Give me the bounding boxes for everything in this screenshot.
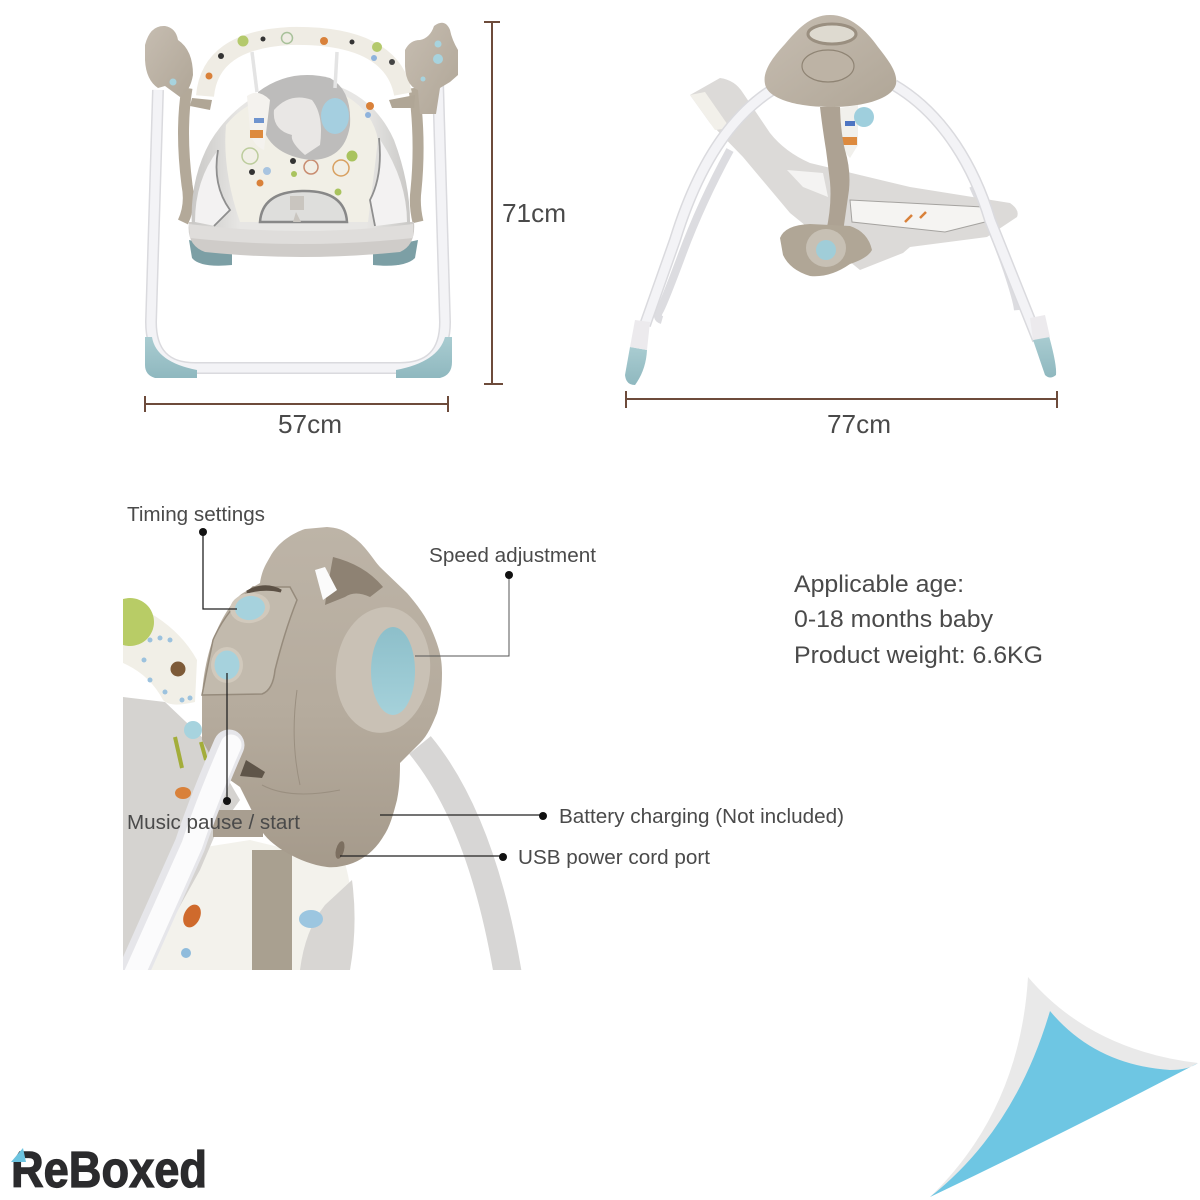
front view: left stitching: [214, 150, 230, 226]
front view: right teal corner: [373, 240, 418, 266]
callout: battery charging: Battery charging (Not included): [559, 805, 844, 828]
close-up: white front tube: [132, 745, 229, 975]
corner curl: blue triangle: [930, 1011, 1198, 1197]
front view: neck pillow: [258, 75, 350, 160]
front view: hanging strings: [252, 52, 337, 92]
front view: arch ends: [190, 95, 415, 110]
side view: white panel front: [850, 200, 987, 232]
close-up: button panel: [202, 587, 297, 695]
side view: hub button: [816, 240, 836, 260]
front view: right side pad: [370, 138, 407, 226]
side view: front right leg highlight: [894, 85, 1038, 340]
close-up: top slot: [247, 587, 281, 592]
close-up: arch brown dot: [170, 662, 186, 676]
dimension label 57cm: 57cm: [278, 409, 342, 439]
callout: timing settings: [127, 503, 265, 609]
side view: seat: [690, 78, 1018, 270]
side view: hub: [780, 224, 872, 276]
side view: front left leg highlight: [645, 90, 772, 325]
page corner curl: [930, 977, 1198, 1197]
side view: left foot cover: [630, 320, 650, 350]
front view: right foot: [396, 337, 452, 378]
front view: arch dots: [206, 32, 395, 80]
product info text block: 0-18 months baby: [794, 606, 993, 633]
side view: front left leg: [645, 90, 772, 325]
close-up: shadow under tube: [240, 760, 265, 778]
callout: battery charging: [380, 805, 844, 828]
side view: centre post: [820, 107, 850, 232]
front view: toy arch: [205, 36, 403, 96]
callout: timing settings: Timing settings: [127, 503, 265, 526]
close-up: seat cushion grey: [123, 697, 240, 970]
close-up: handle recess: [325, 557, 383, 605]
product info text block: Product weight: 6.6KG: [794, 642, 1043, 669]
close-up: USB port: [336, 841, 344, 859]
front view: fabric dots: [242, 102, 374, 196]
ReBoxed logo: ReBoxed: [11, 1141, 207, 1198]
side view: back right leg: [973, 186, 1018, 310]
close-up: music button ring: [211, 647, 243, 683]
front view: seat dome: [192, 78, 410, 234]
close-up: handle window: [315, 567, 337, 600]
side view: hub ring: [806, 229, 846, 267]
side view: left foot: [625, 347, 647, 385]
front view: side arm right: [414, 88, 418, 222]
close-up photo of control head: [106, 527, 508, 975]
front view: inner printed fabric: [225, 88, 378, 222]
front view: front cushion: [189, 224, 413, 244]
front view: left teal corner: [189, 240, 232, 266]
close-up: taupe block behind label: [213, 810, 263, 837]
close-up: control head body: [202, 527, 442, 867]
front view: hub buttons: [170, 40, 443, 86]
front view: giraffe toy: [247, 93, 270, 150]
side view: head unit: [765, 15, 896, 107]
front view: right stitching: [370, 138, 380, 226]
dimension line: depth 77cm: [626, 391, 1057, 408]
front view: left side pad: [195, 150, 230, 226]
front view: left hub: [145, 26, 193, 97]
dimension line: width 57cm: [145, 396, 448, 412]
close-up: white front tube highlight: [134, 745, 231, 975]
close-up: head seam: [262, 690, 340, 794]
close-up: right tube: [420, 745, 508, 975]
callout: USB power cord port: USB power cord port: [518, 846, 710, 869]
front view: frame highlight: [151, 82, 445, 368]
corner curl: grey fold: [930, 977, 1198, 1197]
close-up: dial housing: [336, 607, 430, 733]
close-up: arch green dot: [123, 598, 154, 646]
side view: orange and green marks: [905, 212, 926, 222]
close-up: fabric marks: [175, 721, 323, 958]
product info text block: Applicable age:: [794, 571, 964, 598]
close-up: music button: [214, 650, 240, 680]
front view: left foot: [145, 337, 197, 378]
front view: seat base: [189, 222, 414, 257]
side view: head oval: [802, 50, 854, 82]
dimension label 71cm: 71cm: [502, 198, 566, 228]
side view: right foot: [1033, 336, 1056, 378]
side view: right foot cover: [1030, 315, 1050, 340]
side view of swing: [625, 15, 1056, 385]
front view: giraffe print: [290, 196, 304, 222]
front view: right hub: [405, 23, 458, 114]
close-up: timing button: [235, 596, 265, 620]
dimension line: height 71cm: [484, 22, 503, 384]
close-up: centre post: [252, 850, 292, 975]
front view: elephant toy: [274, 98, 321, 155]
side view: front right leg: [894, 85, 1038, 340]
front view: blue ear: [321, 98, 349, 134]
close-up: toy arch: [123, 615, 197, 704]
side view: back left leg: [658, 150, 730, 320]
side view: handle opening: [808, 24, 856, 44]
callout: speed adjustment: Speed adjustment: [429, 544, 596, 567]
dimension label 77cm: 77cm: [827, 409, 891, 439]
front view of swing: [145, 23, 458, 378]
close-up: grey fabric patch: [300, 880, 355, 970]
close-up: seat fabric white: [152, 840, 350, 970]
callout: speed adjustment: [415, 544, 596, 656]
front view: crotch panel: [260, 191, 347, 222]
close-up: arch blue dots: [142, 636, 192, 702]
close-up: dial: [371, 627, 415, 715]
side view: white panel upper: [787, 170, 828, 197]
close-up: timing button ring: [230, 593, 270, 623]
front view: side arm left: [183, 88, 188, 222]
side view: hanging toy: [840, 105, 874, 158]
callout: music pause / start: [127, 673, 300, 834]
callout: USB power cord port: [340, 846, 710, 869]
side view: headrest print: [690, 92, 730, 130]
front view: frame tube: [151, 82, 445, 368]
callout: music pause / start: Music pause / start: [127, 811, 300, 834]
product info text block: [794, 571, 1043, 669]
